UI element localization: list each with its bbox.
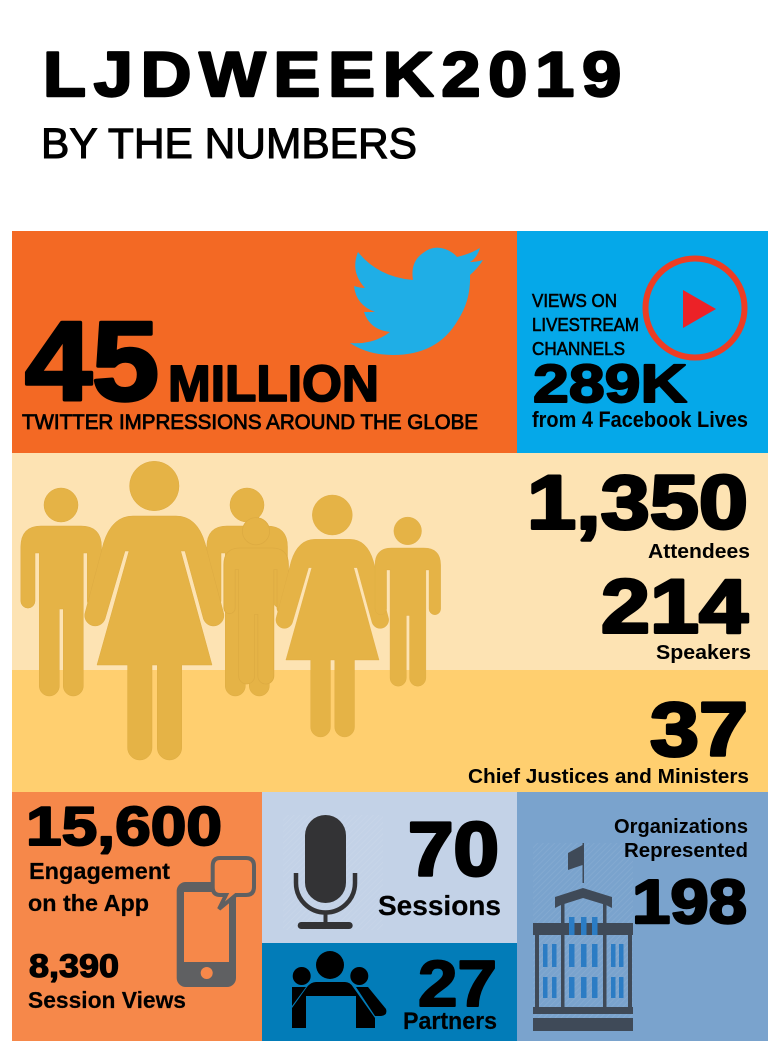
panel: app engagement	[12, 792, 262, 1041]
panel: sessions	[262, 792, 517, 943]
woman large	[85, 461, 224, 760]
label: speakers: Speakers	[656, 641, 751, 664]
label: sessions: Sessions	[378, 890, 501, 921]
label: engagement on the app	[28, 858, 170, 916]
stat: 8,390: 8,390	[29, 948, 119, 984]
label: organizations represented: Organizations	[614, 816, 748, 838]
icon: building	[533, 843, 633, 1031]
title line 2: BY THE NUMBERS	[41, 120, 417, 168]
icon: phone with speech bubble	[177, 858, 254, 987]
label: views on livestream channels	[532, 290, 639, 359]
stat: 15,600: 15,600	[26, 795, 222, 857]
caption: twitter impressions: TWITTER IMPRESSIONS AROUND THE GLOBE	[22, 411, 478, 434]
label: session views: Session Views	[28, 987, 186, 1013]
label: chief justices and ministers: Chief Justices and Ministers	[468, 765, 749, 788]
stat: 214: 214	[601, 564, 748, 650]
label: organizations represented	[614, 816, 748, 862]
icon: twitter bird	[350, 248, 483, 355]
panel: organizations	[517, 792, 768, 1041]
stat: million: MILLION	[168, 355, 379, 412]
stat: 70: 70	[408, 808, 499, 892]
stat: 27: 27	[418, 947, 497, 1020]
caption: from 4 Facebook Lives: from 4 Facebook Lives	[532, 407, 748, 432]
icon: people around laptop	[292, 951, 386, 1028]
icon: microphone	[283, 815, 383, 930]
title	[41, 40, 629, 168]
stat: 37: 37	[650, 688, 748, 772]
label: organizations represented: Represented	[624, 840, 748, 862]
label: engagement on the app: on the App	[28, 890, 149, 916]
icon: group of people	[21, 461, 441, 760]
panel: livestream	[517, 231, 768, 453]
stat: 45: 45	[25, 299, 159, 424]
stat: 1,350: 1,350	[527, 460, 748, 546]
panel: twitter impressions	[12, 231, 517, 453]
label: views on livestream channels: CHANNELS	[532, 338, 625, 359]
label: attendees: Attendees	[648, 540, 750, 563]
child in front	[224, 518, 288, 684]
man 1	[21, 488, 101, 696]
man small	[375, 517, 441, 686]
woman small	[276, 495, 389, 737]
title line 1: LJDWEEK2019	[43, 40, 629, 110]
stat: 289K: 289K	[533, 354, 687, 414]
label: views on livestream channels: LIVESTREAM	[532, 314, 639, 335]
label: views on livestream channels: VIEWS ON	[532, 290, 617, 311]
label: engagement on the app: Engagement	[29, 858, 170, 884]
label: partners: Partners	[403, 1008, 497, 1035]
man 3	[207, 488, 288, 696]
panel: partners	[262, 943, 517, 1041]
stat: 198: 198	[632, 868, 747, 937]
icon: play button	[646, 258, 744, 358]
panel: attendance	[12, 453, 768, 792]
